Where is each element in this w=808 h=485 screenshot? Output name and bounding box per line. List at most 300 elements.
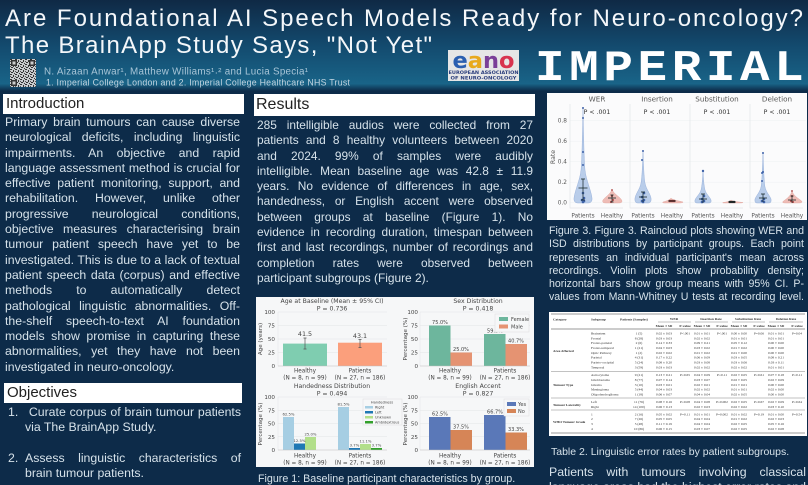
table rows: area affected: 0.14 ± 0.33 <box>656 341 672 345</box>
chart: handedness distribution: (N = 8, n = 99) <box>283 460 327 466</box>
chart: English accent: English Accent <box>455 383 501 390</box>
chart: Insertion: P < .001 <box>644 109 670 116</box>
table rows: area affected: 0.17 ± 0.22 <box>656 356 672 360</box>
table rows: area affected: Frontal <box>591 336 601 340</box>
table rows: WHO tumour grade: P=0.19 <box>754 412 764 416</box>
table rows: area affected: Fronto-temporal <box>591 346 614 350</box>
chart: age at baseline: (N = 8, n = 99) <box>283 376 327 382</box>
text: introduction body: progressive neurological conditions, <box>5 207 240 221</box>
table rows: area affected: Fronto-parietal <box>591 341 612 345</box>
title: The BrainApp Study Says, "Not Yet" <box>5 32 432 59</box>
chart: sex distribution: Female <box>511 317 529 323</box>
table rows: tumour type: P=0.11 <box>717 373 727 377</box>
table: linguistic error rates by patient subgroups: Area Affected <box>553 349 574 353</box>
chart: Insertion: Insertion <box>641 94 673 104</box>
text: introduction body: rehabilitation. However, unlike other <box>5 191 240 205</box>
table: linguistic error rates by patient subgroups: Insertion Rate <box>700 317 722 321</box>
chart: English accent: No <box>518 409 525 415</box>
y axis labels: 0.4 <box>558 160 567 166</box>
table rows: area affected: 0.01 ± 0.01 <box>768 365 784 369</box>
text: introduction body: neurological deficits, including linguistic <box>5 130 240 144</box>
text: introduction body: patient speech data (corpus) and effective <box>5 268 240 282</box>
chart: handedness distribution: Percentage (%) <box>258 403 264 445</box>
table rows: tumour type: 8 (77) <box>635 378 644 382</box>
chart: English accent: 50 <box>411 422 418 428</box>
table rows: area affected: 0.00 ± 0.00 <box>731 332 747 336</box>
chart: Deletion: P < .001 <box>764 109 790 116</box>
table rows: area affected: 0.01 ± 0.01 <box>694 332 710 336</box>
caption: figure 3: recordings. Violin plots show probability density; <box>549 265 804 277</box>
table rows: tumour type: 0.01 ± 0.01 <box>731 388 747 392</box>
chart: age at baseline: Age (years) <box>258 323 264 355</box>
chart: handedness distribution: 25.0% <box>304 432 317 436</box>
chart: sex distribution: 59.3% <box>487 328 503 334</box>
table rows: tumour type: 0.03 ± 0.07 <box>694 378 710 382</box>
table: linguistic error rates by patient subgroups: WER <box>670 317 679 321</box>
table: linguistic error rates by patient subgroups: Mean ± SD <box>731 324 748 328</box>
chart: handedness distribution: 12.5% <box>293 438 306 443</box>
chart: English accent: 33.3% <box>508 427 524 433</box>
table rows: WHO tumour grade: 1 <box>591 412 593 416</box>
table: linguistic error rates by patient subgroups: P-value <box>679 324 691 328</box>
table rows: WHO tumour grade: 0.03 ± 0.07 <box>694 427 710 431</box>
table rows: area affected <box>591 332 802 369</box>
table rows: WHO tumour grade: 0.01 ± 0.02 <box>731 412 747 416</box>
table rows: tumour type: 0.13 ± 0.21 <box>656 373 672 377</box>
table rows: tumour type: Oligodendroglioma <box>591 392 619 396</box>
table: linguistic error rates by patient subgroups: Mean ± SD <box>694 324 711 328</box>
table rows: tumour type: 0.02 ± 0.09 <box>768 378 784 382</box>
chart: handedness distribution: Healthy <box>294 454 317 460</box>
table: linguistic error rates by patient subgroups: P-value <box>753 324 765 328</box>
title: Are Foundational AI Speech Models Ready for Neuro-oncology? <box>5 5 803 32</box>
table rows: area affected: Optic Pathway <box>591 351 612 355</box>
chart: WER: Healthy <box>601 214 624 220</box>
table: linguistic error rates by patient subgroups: Mean ± SD <box>768 324 785 328</box>
text: results body: participant subgroups (Figure 2). <box>257 271 429 285</box>
table rows: tumour type: 0.02 ± 0.05 <box>731 373 747 377</box>
chart: Insertion: Patients <box>631 214 655 220</box>
table rows: area affected: 0.01 ± 0.01 <box>768 336 784 340</box>
text: introduction body: the-shelf speech-to-text AI foundation <box>5 314 240 328</box>
table rows: area affected: 0.02 ± 0.02 <box>694 365 710 369</box>
objective 2: Assess linguistic characteristics of <box>25 451 241 465</box>
table rows: area affected: Brainstem <box>591 332 606 336</box>
objective 2: 2. <box>8 451 18 465</box>
chart: Deletion: Patients <box>751 214 775 220</box>
table rows: tumour type: 0.02 ± 0.00 <box>768 388 784 392</box>
heading: Results <box>254 94 535 116</box>
text: introduction body <box>5 115 240 374</box>
text: objectives list <box>8 405 242 480</box>
table rows: tumour laterality <box>591 400 802 409</box>
chart: handedness distribution: 50 <box>268 422 275 428</box>
chart: age at baseline: 0 <box>271 364 275 370</box>
chart: Substitution: Substitution <box>695 94 739 104</box>
chart: English accent: 25 <box>411 435 418 441</box>
chart: handedness distribution: Left <box>375 410 382 414</box>
chart: handedness distribution: 25 <box>268 435 275 441</box>
heading: Results: Results <box>256 96 309 113</box>
table rows: tumour type: Astrocytoma <box>591 373 610 377</box>
table rows: WHO tumour grade: 0.01 ± 0.02 <box>731 417 747 421</box>
table rows: WHO tumour grade: 0.11 ± 0.19 <box>656 422 672 426</box>
caption: figure 3: Figure 3. Figure 3. Raincloud plots showing WER and <box>549 225 804 237</box>
chart: handedness distribution: P = 0.494 <box>317 390 347 398</box>
chart: sex distribution: (N = 8, n = 99) <box>428 376 472 382</box>
chart: handedness distribution: 0 <box>271 448 275 454</box>
y axis labels: Rate <box>550 150 557 164</box>
table rows: area affected: 0.03 ± 0.02 <box>694 346 710 350</box>
chart: Deletion: Healthy <box>781 214 804 220</box>
chart: handedness distribution: Unknown <box>375 416 391 420</box>
text: introduction body: impairments. An objective and rapid <box>5 146 240 160</box>
chart: sex distribution: Male <box>511 324 523 330</box>
table rows: tumour type: 0.04 ± 0.09 <box>694 373 710 377</box>
table rows: area affected: Parietal <box>591 356 602 360</box>
chart: Substitution <box>690 94 744 220</box>
chart: handedness distribution: 3.7% <box>350 442 360 448</box>
authors and affiliations: 1. Imperial College London and 2. Imperial College Healthcare NHS Trust <box>46 78 351 88</box>
table rows: area affected: 1 (5) <box>636 332 643 336</box>
text: introduction body: effective patient monitoring, support, and <box>5 176 240 190</box>
chart: English accent: P = 0.827 <box>463 390 493 398</box>
y axis labels <box>550 119 567 207</box>
table rows: tumour type: P=0.11 <box>792 373 802 377</box>
table rows: area affected: 0.08 ± 0.21 <box>768 356 784 360</box>
chart: handedness distribution: Handedness Distribution <box>294 383 370 390</box>
y axis labels: 0.0 <box>558 201 567 207</box>
objective 1: Curate corpus of brain tumour patients <box>29 405 241 419</box>
chart: age at baseline: 100 <box>264 310 275 316</box>
table rows: area affected: 0.01 ± 0.01 <box>731 336 747 340</box>
icon: QR code <box>10 59 36 87</box>
chart: sex distribution: 40.7% <box>508 338 524 344</box>
chart: English accent: (N = 8, n = 99) <box>428 460 472 466</box>
text: introduction body: methods to automatically detect <box>5 283 240 297</box>
chart: English accent: (N = 27, n = 186) <box>480 460 530 466</box>
table rows: WHO tumour grade: 0.04 ± 0.04 <box>694 422 710 426</box>
table rows: area affected: P<.001 <box>680 332 690 336</box>
table rows: tumour laterality: P=0.64 <box>792 400 802 404</box>
table rows: area affected: 0.02 ± 0.03 <box>656 332 672 336</box>
chart: age at baseline: Patients <box>349 368 371 374</box>
chart: sex distribution: Healthy <box>439 368 462 374</box>
text: introduction body: investigated in neuro-oncology. <box>5 360 174 374</box>
objective 2 <box>8 451 242 480</box>
chart: handedness distribution: Handedness <box>371 400 393 404</box>
table rows: tumour type: 0.04 ± 0.03 <box>656 388 672 392</box>
table rows: WHO tumour grade: 0.05 ± 0.02 <box>656 412 672 416</box>
chart: English accent: 100 <box>407 395 418 401</box>
table rows: area affected: 2 (6) <box>636 341 643 345</box>
table rows: area affected: 0.00 ± 0.00 <box>768 341 784 345</box>
table rows: area affected: 0.01 ± 0.02 <box>694 351 710 355</box>
table rows: tumour laterality: 0.02 ± 0.02 <box>731 405 747 409</box>
table rows: area affected: 1 (21) <box>635 346 644 350</box>
chart: sex distribution: Patients <box>494 368 516 374</box>
text: conclusion paragraph: Patients with tumours involving classical <box>549 465 806 479</box>
table rows: tumour laterality: 0.06 ± 0.13 <box>656 405 672 409</box>
table: linguistic error rates by patient subgroups: P-value <box>791 324 803 328</box>
chart: age at baseline: P = 0.736 <box>317 306 347 312</box>
table rows: tumour laterality: 11 (76) <box>634 400 645 404</box>
text: results body: completion rates were observed between <box>257 256 533 270</box>
chart: WER <box>570 94 624 220</box>
text: introduction body: tumour patient speech have yet to be <box>5 237 240 251</box>
table rows: area affected: 0.08 ± 0.20 <box>656 360 672 364</box>
chart: age at baseline: Age at Baseline (Mean ± 95% CI) <box>280 298 384 305</box>
heading: Objectives <box>4 383 242 403</box>
chart: sex distribution: P = 0.418 <box>463 306 493 312</box>
chart: English accent: Percentage (%) <box>403 403 409 445</box>
logo: EANO: EUROPEAN ASSOCIATION <box>448 70 519 76</box>
text: introduction body: objective measures characterising brain <box>5 222 240 236</box>
table rows: WHO tumour grade: 10 (86) <box>634 427 645 431</box>
table rows: area affected: 4 (31) <box>635 356 644 360</box>
caption: figure 3: values from Mann-Whitney U tests at recording level. <box>549 291 804 303</box>
table rows: area affected: 0.00 ± 0.00 <box>768 346 784 350</box>
chart: English accent: Healthy <box>439 454 462 460</box>
table rows: area affected: 0.01 ± 0.01 <box>768 332 784 336</box>
chart: age at baseline: 75 <box>268 324 275 330</box>
table rows: WHO tumour grade: 0.05 ± 0.05 <box>656 417 672 421</box>
table rows: tumour laterality: 14 (100) <box>633 405 646 409</box>
table rows: tumour type: 0.07 ± 0.18 <box>768 373 784 377</box>
chart: age at baseline: (N = 27, n = 186) <box>335 376 385 382</box>
logo: EANO: eano <box>452 49 514 74</box>
chart: handedness distribution: Patients <box>349 454 371 460</box>
objective 1 <box>8 405 241 434</box>
table: linguistic error rates by patient subgroups: Patients (Samples) <box>620 318 649 322</box>
chart: WER: WER <box>589 94 605 104</box>
table rows: tumour type: 0.02 ± 0.01 <box>694 383 710 387</box>
table rows: area affected: 0.06 ± 0.09 <box>694 356 710 360</box>
chart: English accent: 75 <box>411 408 418 414</box>
table rows: tumour type: 0.00 ± 0.00 <box>768 392 784 396</box>
table rows: area affected: 5 (24) <box>635 360 644 364</box>
table rows: WHO tumour grade: 5 (48) <box>635 422 644 426</box>
table rows: tumour laterality: 0.02 ± 0.03 <box>694 405 710 409</box>
text: results body: first and last recordings, number of recordings and <box>257 240 533 254</box>
table rows: tumour type: 9 (21) <box>635 373 644 377</box>
text: results body: handedness, or English accent were observed <box>257 194 533 208</box>
table: linguistic error rates by patient subgroups: P-value <box>716 324 728 328</box>
table rows: tumour type <box>591 373 802 396</box>
caption: figure 3: ISD distributions by participant groups. Each point <box>549 238 804 250</box>
caption: figure 3 <box>549 225 804 303</box>
chart: Insertion <box>630 94 684 220</box>
chart: age at baseline: Healthy <box>294 368 317 374</box>
table rows: WHO tumour grade: 0.05 ± 0.16 <box>768 422 784 426</box>
table rows: tumour laterality: P=0.67 <box>754 400 764 404</box>
table rows: WHO tumour grade: 0.02 ± 0.03 <box>768 417 784 421</box>
chart: English accent: Patients <box>494 454 516 460</box>
chart: Substitution: Patients <box>691 214 715 220</box>
table rows: tumour type: 0.01 ± 0.01 <box>731 383 747 387</box>
text: introduction body: models show promise in capturing these <box>5 329 240 343</box>
table rows: area affected: 0.04 ± 0.03 <box>656 346 672 350</box>
heading: Introduction: Introduction <box>6 95 84 112</box>
table rows: WHO tumour grade: 7 (26) <box>635 417 644 421</box>
text: results body: 285 intelligible audios were collected from 27 <box>257 118 533 132</box>
table rows: area affected: 0.03 ± 0.05 <box>731 356 747 360</box>
chart: age at baseline <box>258 298 387 382</box>
table rows: area affected: P=0.04 <box>792 332 802 336</box>
table rows: area affected: 0.02 ± 0.02 <box>656 351 672 355</box>
chart: handedness distribution: Ambidextrous <box>375 420 399 424</box>
chart: sex distribution: 50 <box>411 337 418 343</box>
chart: handedness distribution: 81.5% <box>337 402 350 406</box>
chart: WER: Patients <box>571 214 595 220</box>
chart: handedness distribution: Right <box>375 406 385 410</box>
table rows: area affected: Parieto-occipital <box>591 360 614 364</box>
chart: sex distribution: 25.0% <box>453 347 469 353</box>
table rows: area affected: 0.01 ± 0.00 <box>731 351 747 355</box>
table rows: tumour type: 5 (44) <box>635 388 644 392</box>
table: linguistic error rates by patient subgroups: Mean ± SD <box>656 324 673 328</box>
table rows: tumour type: Glioblastoma <box>591 378 610 382</box>
text: results body: evidence in recording duration, timespan between <box>257 225 533 239</box>
table rows: tumour type: 0.03 ± 0.01 <box>656 383 672 387</box>
table: linguistic error rates by patient subgroups: Subgroup <box>591 318 606 322</box>
table rows: WHO tumour grade: 0.01 ± 0.01 <box>694 412 710 416</box>
logo: Imperial: IMPERIAL <box>535 44 804 94</box>
table rows: tumour laterality: Left <box>591 400 597 404</box>
table rows: area affected: P<.001 <box>717 332 727 336</box>
heading: Objectives: Objectives <box>7 384 77 401</box>
chart: English accent <box>403 383 530 466</box>
authors and affiliations: N. Aizaan Anwar¹, Matthew Williams¹˒² and Lucia Specia¹ <box>44 66 309 78</box>
table: linguistic error rates by patient subgroups: Deletion Rate <box>776 317 797 321</box>
chart: sex distribution: Percentage (%) <box>403 318 409 360</box>
table rows: tumour laterality: P=0.08 <box>680 400 690 404</box>
chart: English accent: 66.7% <box>487 410 503 416</box>
caption: figure 1: Figure 1: Baseline participant characteristics by group. <box>258 473 515 485</box>
chart: age at baseline: 43.1 <box>353 332 367 340</box>
chart: handedness distribution: (N = 27, n = 186) <box>335 460 385 466</box>
table rows: tumour type: 0.02 ± 0.05 <box>731 392 747 396</box>
table: linguistic error rates by patient subgroups: Category <box>553 318 567 322</box>
heading: Introduction <box>3 94 244 114</box>
table rows: tumour laterality: 0.03 ± 0.10 <box>768 405 784 409</box>
table rows: tumour type: 0.07 ± 0.14 <box>656 378 672 382</box>
table rows: area affected: 0.03 ± 0.11 <box>768 360 784 364</box>
table rows: area affected: 0.05 ± 0.12 <box>731 341 747 345</box>
chart: WER: P < .001 <box>584 109 610 116</box>
table rows: tumour type: Glioma <box>591 383 602 387</box>
text: introduction body: investigated. This is due to a lack of textual <box>5 253 240 267</box>
chart: handedness distribution: 100 <box>264 395 275 401</box>
table rows: area affected: 0.03 ± 0.08 <box>694 360 710 364</box>
table: linguistic error rates by patient subgroups: Tumour Type <box>553 383 574 387</box>
table rows: area affected: 0.00 ± 0.00 <box>768 351 784 355</box>
table rows: area affected: 8 (28) <box>635 336 644 340</box>
table rows: area affected: 0.01 ± 0.02 <box>731 346 747 350</box>
title <box>5 5 803 59</box>
chart: sex distribution: 75.0% <box>432 320 448 326</box>
table rows: tumour type: 0.00 ± 0.00 <box>768 383 784 387</box>
caption: figure 3: horizontal bars show group means with 95% CI. P- <box>549 278 804 290</box>
table rows: tumour type: 0.04 ± 0.04 <box>694 392 710 396</box>
text: results body: patients and 8 healthy volunteers between 2020 <box>257 133 533 147</box>
chart: handedness distribution: 11.1% <box>359 438 372 444</box>
table rows: WHO tumour grade <box>591 412 802 431</box>
table rows: tumour type: 3 (10) <box>635 383 644 387</box>
y axis labels: 0.2 <box>558 180 567 186</box>
table rows: area affected: 3 (59) <box>635 365 644 369</box>
caption: figure 3: represents an individual participant's mean across <box>549 252 804 264</box>
y axis labels: 0.6 <box>558 139 567 145</box>
table rows: area affected: 0.02 ± 0.02 <box>694 336 710 340</box>
chart: age at baseline: 50 <box>268 337 275 343</box>
text: introduction body: abnormalities, yet they have not been <box>5 344 240 358</box>
table rows: tumour type: 0.02 ± 0.02 <box>694 388 710 392</box>
authors and affiliations <box>44 66 351 88</box>
chart: handedness distribution: 75 <box>268 408 275 414</box>
chart: Deletion <box>750 94 804 220</box>
table rows: WHO tumour grade: 3 <box>591 422 593 426</box>
table rows: area affected: Temporal <box>591 365 604 369</box>
table rows: WHO tumour grade: 2 (16) <box>635 412 644 416</box>
chart: sex distribution: (N = 27, n = 186) <box>480 376 530 382</box>
text: introduction body: language assessment method is crucial for <box>5 161 240 175</box>
table rows: area affected: 0.03 ± 0.03 <box>656 365 672 369</box>
table rows: WHO tumour grade: 0.02 ± 0.05 <box>731 422 747 426</box>
text: results body: intelligible. Mean baseline age was 42.8 ± 11.9 <box>257 164 533 178</box>
chart: Insertion: Healthy <box>661 214 684 220</box>
chart: Substitution: Healthy <box>721 214 744 220</box>
table rows: tumour type: 0.02 ± 0.05 <box>731 378 747 382</box>
table rows: area affected: 0.03 ± 0.03 <box>656 336 672 340</box>
table rows: tumour laterality: 0.02 ± 0.05 <box>731 400 747 404</box>
table rows: tumour laterality: 0.04 ± 0.08 <box>694 400 710 404</box>
text: results body: between groups at baseline (Figure 1). No <box>257 210 533 224</box>
chart: sex distribution <box>403 298 530 382</box>
table rows: area affected: P=0.06 <box>754 332 764 336</box>
chart: handedness distribution <box>258 383 402 466</box>
table rows: WHO tumour grade: P=0.54 <box>792 412 802 416</box>
logo: EANO <box>448 49 519 82</box>
chart: sex distribution: 0 <box>414 364 418 370</box>
table rows: tumour type: Meningioma <box>591 388 609 392</box>
text: introduction body: pathological linguistic abnormalities. Off- <box>5 299 240 313</box>
logo: EANO: OF NEURO-ONCOLOGY <box>450 76 517 82</box>
chart: English accent: 62.5% <box>432 412 448 418</box>
table rows: WHO tumour grade: 0.04 ± 0.04 <box>694 417 710 421</box>
chart: age at baseline: 41.5 <box>298 330 312 338</box>
table rows: WHO tumour grade: 0.01 ± 0.00 <box>768 412 784 416</box>
text: results body: years. No evidence of differences in age, sex, <box>257 179 533 193</box>
table rows: area affected: 0.02 ± 0.02 <box>731 365 747 369</box>
chart: Deletion: Deletion <box>762 94 792 104</box>
table rows: tumour type: 0.06 ± 0.07 <box>656 392 672 396</box>
table rows: tumour type: P=0.65 <box>680 373 690 377</box>
table rows: WHO tumour grade: 4 <box>591 427 593 431</box>
chart: Substitution: P < .001 <box>704 109 730 116</box>
header band <box>0 0 808 91</box>
table rows: tumour type: P=0.61 <box>754 373 764 377</box>
table rows: WHO tumour grade: P=0.002 <box>716 412 728 416</box>
chart: sex distribution: 25 <box>411 350 418 356</box>
chart: handedness distribution: 3.7% <box>372 442 382 448</box>
objective 1: 1. <box>8 405 18 419</box>
chart: English accent: 37.5% <box>453 424 469 430</box>
table rows: area affected: 0.03 ± 0.06 <box>731 360 747 364</box>
chart: sex distribution: Sex Distribution <box>453 298 503 305</box>
text: results body: and 2024. 99% of samples were audibly <box>257 149 533 163</box>
table rows: area affected: 0.09 ± 0.21 <box>694 341 710 345</box>
